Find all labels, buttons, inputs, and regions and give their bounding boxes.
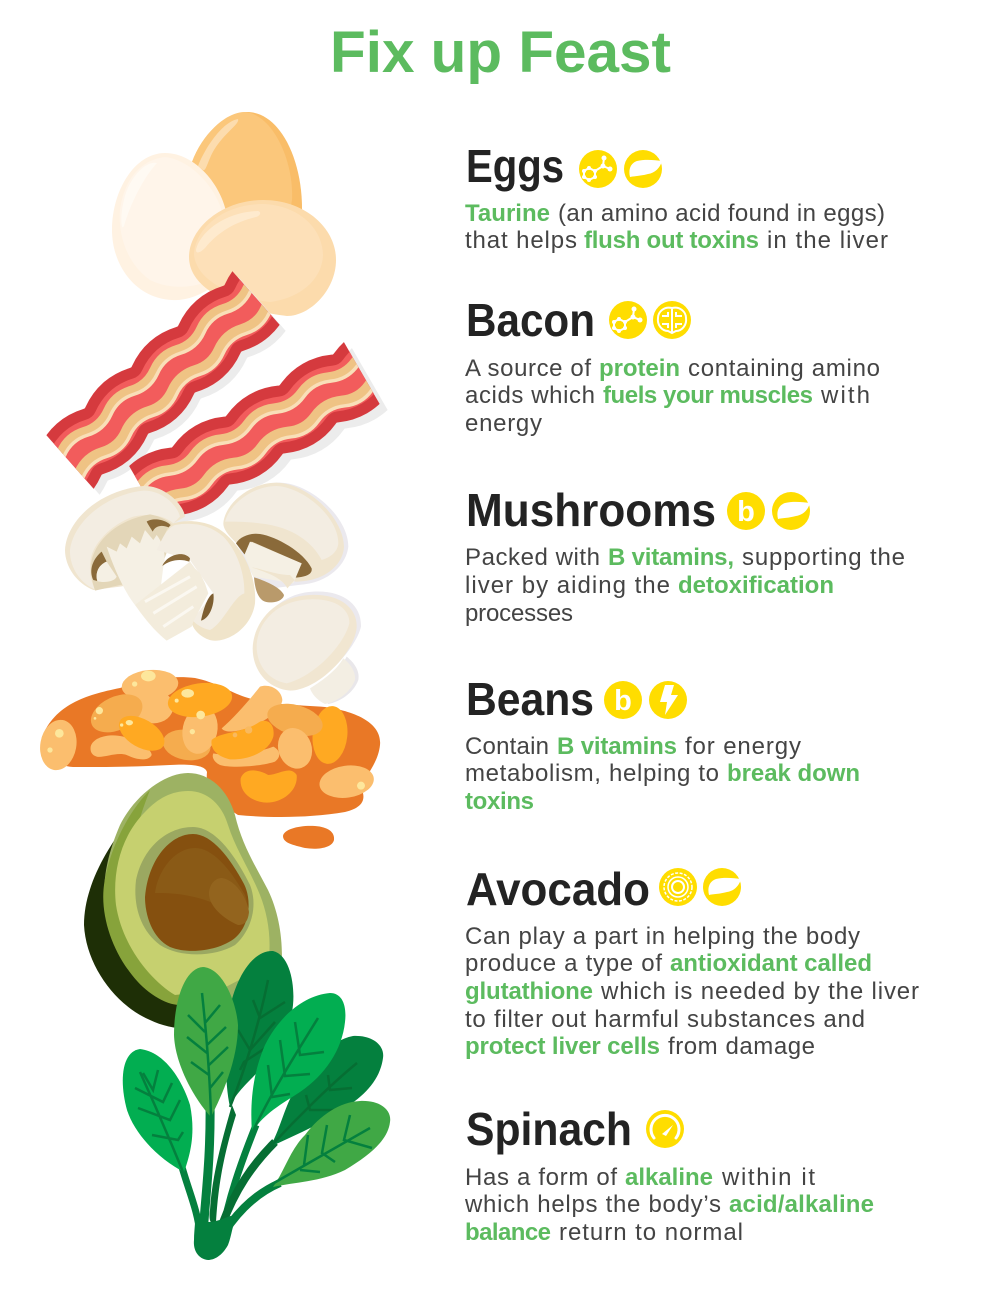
- body: bacon: containing amino: [688, 355, 880, 382]
- body: mushrooms: processes: [465, 600, 573, 627]
- leaf lower right: [267, 1101, 390, 1187]
- heading: eggs: Eggs: [466, 140, 564, 192]
- leaf back right: [270, 1036, 383, 1147]
- body: eggs: flush out toxins: [584, 227, 759, 254]
- illustration: mushrooms: [65, 483, 361, 704]
- body: avocado: Can play a part in helping the body: [465, 923, 860, 950]
- body: eggs: Taurine: [465, 200, 550, 227]
- body: spinach: return to normal: [559, 1219, 743, 1246]
- illustration: baked beans: [36, 668, 380, 849]
- body: bacon: A source of: [465, 355, 591, 382]
- avocado skin: [84, 800, 200, 1029]
- body: bacon: acids which: [465, 382, 595, 409]
- body: avocado: produce a type of: [465, 950, 662, 977]
- body: beans: Contain: [465, 733, 549, 760]
- title: Fix up Feast: [330, 20, 671, 85]
- avocado flesh: [115, 791, 270, 995]
- stems: [180, 1100, 280, 1240]
- body: mushrooms: B vitamins,: [608, 544, 734, 571]
- body: avocado: glutathione: [465, 978, 593, 1005]
- illustration: food stack: [35, 112, 400, 1260]
- icon: amino acid molecule: [579, 150, 617, 188]
- body: bacon: energy: [465, 410, 542, 437]
- heading: beans: Beans: [466, 673, 594, 725]
- body: beans: B vitamins: [557, 733, 677, 760]
- icon: liver: [772, 492, 810, 530]
- icon: vitamin b: b: [737, 496, 755, 528]
- leaf bright middle: [251, 993, 345, 1133]
- bacon strip back: [46, 271, 286, 494]
- body: spinach: balance: [465, 1219, 551, 1246]
- body: avocado: protect liver cells: [465, 1033, 660, 1060]
- sauce drip: [283, 826, 334, 849]
- avocado pit ring: [135, 827, 254, 954]
- icon: liver: [624, 150, 662, 188]
- avocado rind: [104, 773, 282, 1010]
- heading: mushrooms: Mushrooms: [466, 484, 716, 536]
- body: beans: break down: [727, 760, 860, 787]
- body: avocado: which is needed by the liver: [600, 978, 919, 1005]
- body: spinach: alkaline: [625, 1164, 713, 1191]
- icon: vitamin b: [727, 492, 765, 530]
- icon: gauge: [646, 1110, 684, 1148]
- body: beans: for energy: [685, 733, 801, 760]
- body: spinach: which helps the body’s: [464, 1191, 721, 1218]
- heading: spinach: Spinach: [466, 1103, 632, 1155]
- illustration: bacon: [46, 271, 388, 523]
- mushroom middle: [135, 521, 255, 641]
- section: beans: [465, 673, 860, 815]
- heading: bacon: Bacon: [466, 294, 595, 346]
- bacon strip front: [129, 342, 388, 523]
- body: mushrooms: supporting the: [742, 544, 905, 571]
- illustration: spinach: [123, 951, 390, 1260]
- body: mushrooms: Packed with: [465, 544, 600, 571]
- icon: brain: [653, 301, 691, 339]
- beans: [36, 668, 376, 803]
- section: bacon: [465, 294, 880, 437]
- icon: liver: [703, 868, 741, 906]
- section: avocado: [465, 863, 919, 1060]
- leaf back top: [226, 951, 293, 1107]
- bean sauce: [42, 677, 380, 817]
- body: mushrooms: detoxification: [678, 572, 834, 599]
- body: eggs: [465, 200, 888, 254]
- section: eggs: [465, 140, 888, 254]
- body: bacon: with: [820, 382, 870, 409]
- icon: vitamin b: b: [614, 685, 632, 717]
- leaf left: [123, 1049, 192, 1172]
- icon: antioxidant rings: [659, 868, 697, 906]
- icon: energy bolt: [649, 681, 687, 719]
- body: beans: toxins: [465, 788, 534, 815]
- body: beans: [465, 733, 860, 815]
- body: avocado: from damage: [668, 1033, 815, 1060]
- bean highlights: [47, 671, 365, 790]
- body: avocado: [465, 923, 919, 1060]
- icon: vitamin b: [604, 681, 642, 719]
- body: mushrooms: liver by aiding the: [465, 572, 670, 599]
- illustration: eggs: [112, 112, 336, 316]
- body: bacon: protein: [599, 355, 680, 382]
- mushroom bottom right: [253, 592, 361, 704]
- mushroom top right: [223, 483, 348, 602]
- section: spinach: [464, 1103, 874, 1246]
- leaf centre: [174, 967, 238, 1117]
- body: spinach: within it: [721, 1164, 815, 1191]
- body: bacon: [465, 355, 880, 437]
- body: beans: metabolism, helping to: [465, 760, 719, 787]
- avocado pit: [145, 834, 249, 951]
- body: avocado: antioxidant called: [670, 950, 872, 977]
- body: spinach: [464, 1164, 874, 1246]
- body: spinach: acid/alkaline: [729, 1191, 874, 1218]
- icon: amino acid molecule: [609, 301, 647, 339]
- illustration: avocado: [84, 773, 282, 1029]
- body: eggs: (an amino acid found in eggs): [558, 200, 885, 227]
- body: eggs: in the liver: [767, 227, 888, 254]
- section: mushrooms: [465, 484, 905, 627]
- body: mushrooms: [465, 544, 905, 627]
- body: eggs: that helps: [465, 227, 577, 254]
- body: spinach: Has a form of: [465, 1164, 617, 1191]
- stem base: [194, 1203, 237, 1260]
- body: bacon: fuels your muscles: [603, 382, 813, 409]
- heading: avocado: Avocado: [466, 863, 650, 915]
- mushroom left: [65, 486, 185, 605]
- body: avocado: to filter out harmful substances and: [465, 1006, 865, 1033]
